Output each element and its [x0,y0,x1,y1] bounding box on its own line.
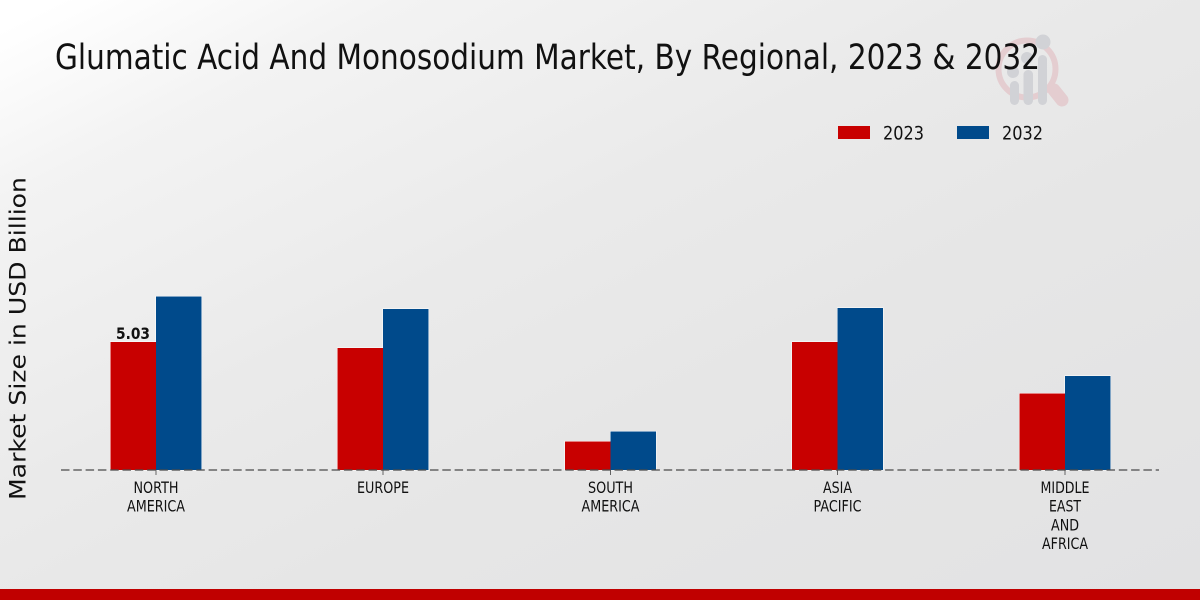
legend item: 2032 [957,122,1043,144]
legend [838,122,1043,144]
category label: Middle East and Africa: MIDDLE [1040,478,1090,497]
bars: Europe [337,308,429,470]
footer bar [0,589,1200,600]
bars: Asia Pacific [792,308,884,470]
bars: North America [110,296,202,470]
category label: Middle East and Africa: AND [1051,516,1079,534]
category label: Middle East and Africa: AFRICA [1042,534,1088,553]
legend item: 2023 [838,122,924,144]
y axis label: Market Size in USD Billion [6,177,32,500]
axis baseline [61,469,1159,471]
category label: Asia Pacific [814,478,862,516]
category label: Asia Pacific: PACIFIC [814,496,862,516]
category label: Middle East and Africa [1040,478,1090,553]
bars: Middle East and Africa [1019,376,1111,470]
bars: South America [564,431,656,470]
watermark logo [998,34,1062,105]
category label: South America: SOUTH [588,478,633,497]
category label: North America: AMERICA [127,496,185,516]
category label: Asia Pacific: ASIA [823,478,852,497]
category label: Middle East and Africa: EAST [1049,496,1081,516]
bar chart [61,296,1159,553]
legend item: 2023: 2023 [883,122,924,144]
data label: 5.03: 5.03 [116,324,150,343]
title: Glumatic Acid And Monosodium Market, By Regional, 2023 & 2032 [55,38,1040,78]
legend item: 2032: 2032 [1002,122,1043,144]
category label: North America: NORTH [134,478,178,497]
category label: South America [582,478,640,516]
category label: North America [127,478,185,516]
category label: Europe: EUROPE [357,478,409,497]
category label: South America: AMERICA [582,496,640,516]
